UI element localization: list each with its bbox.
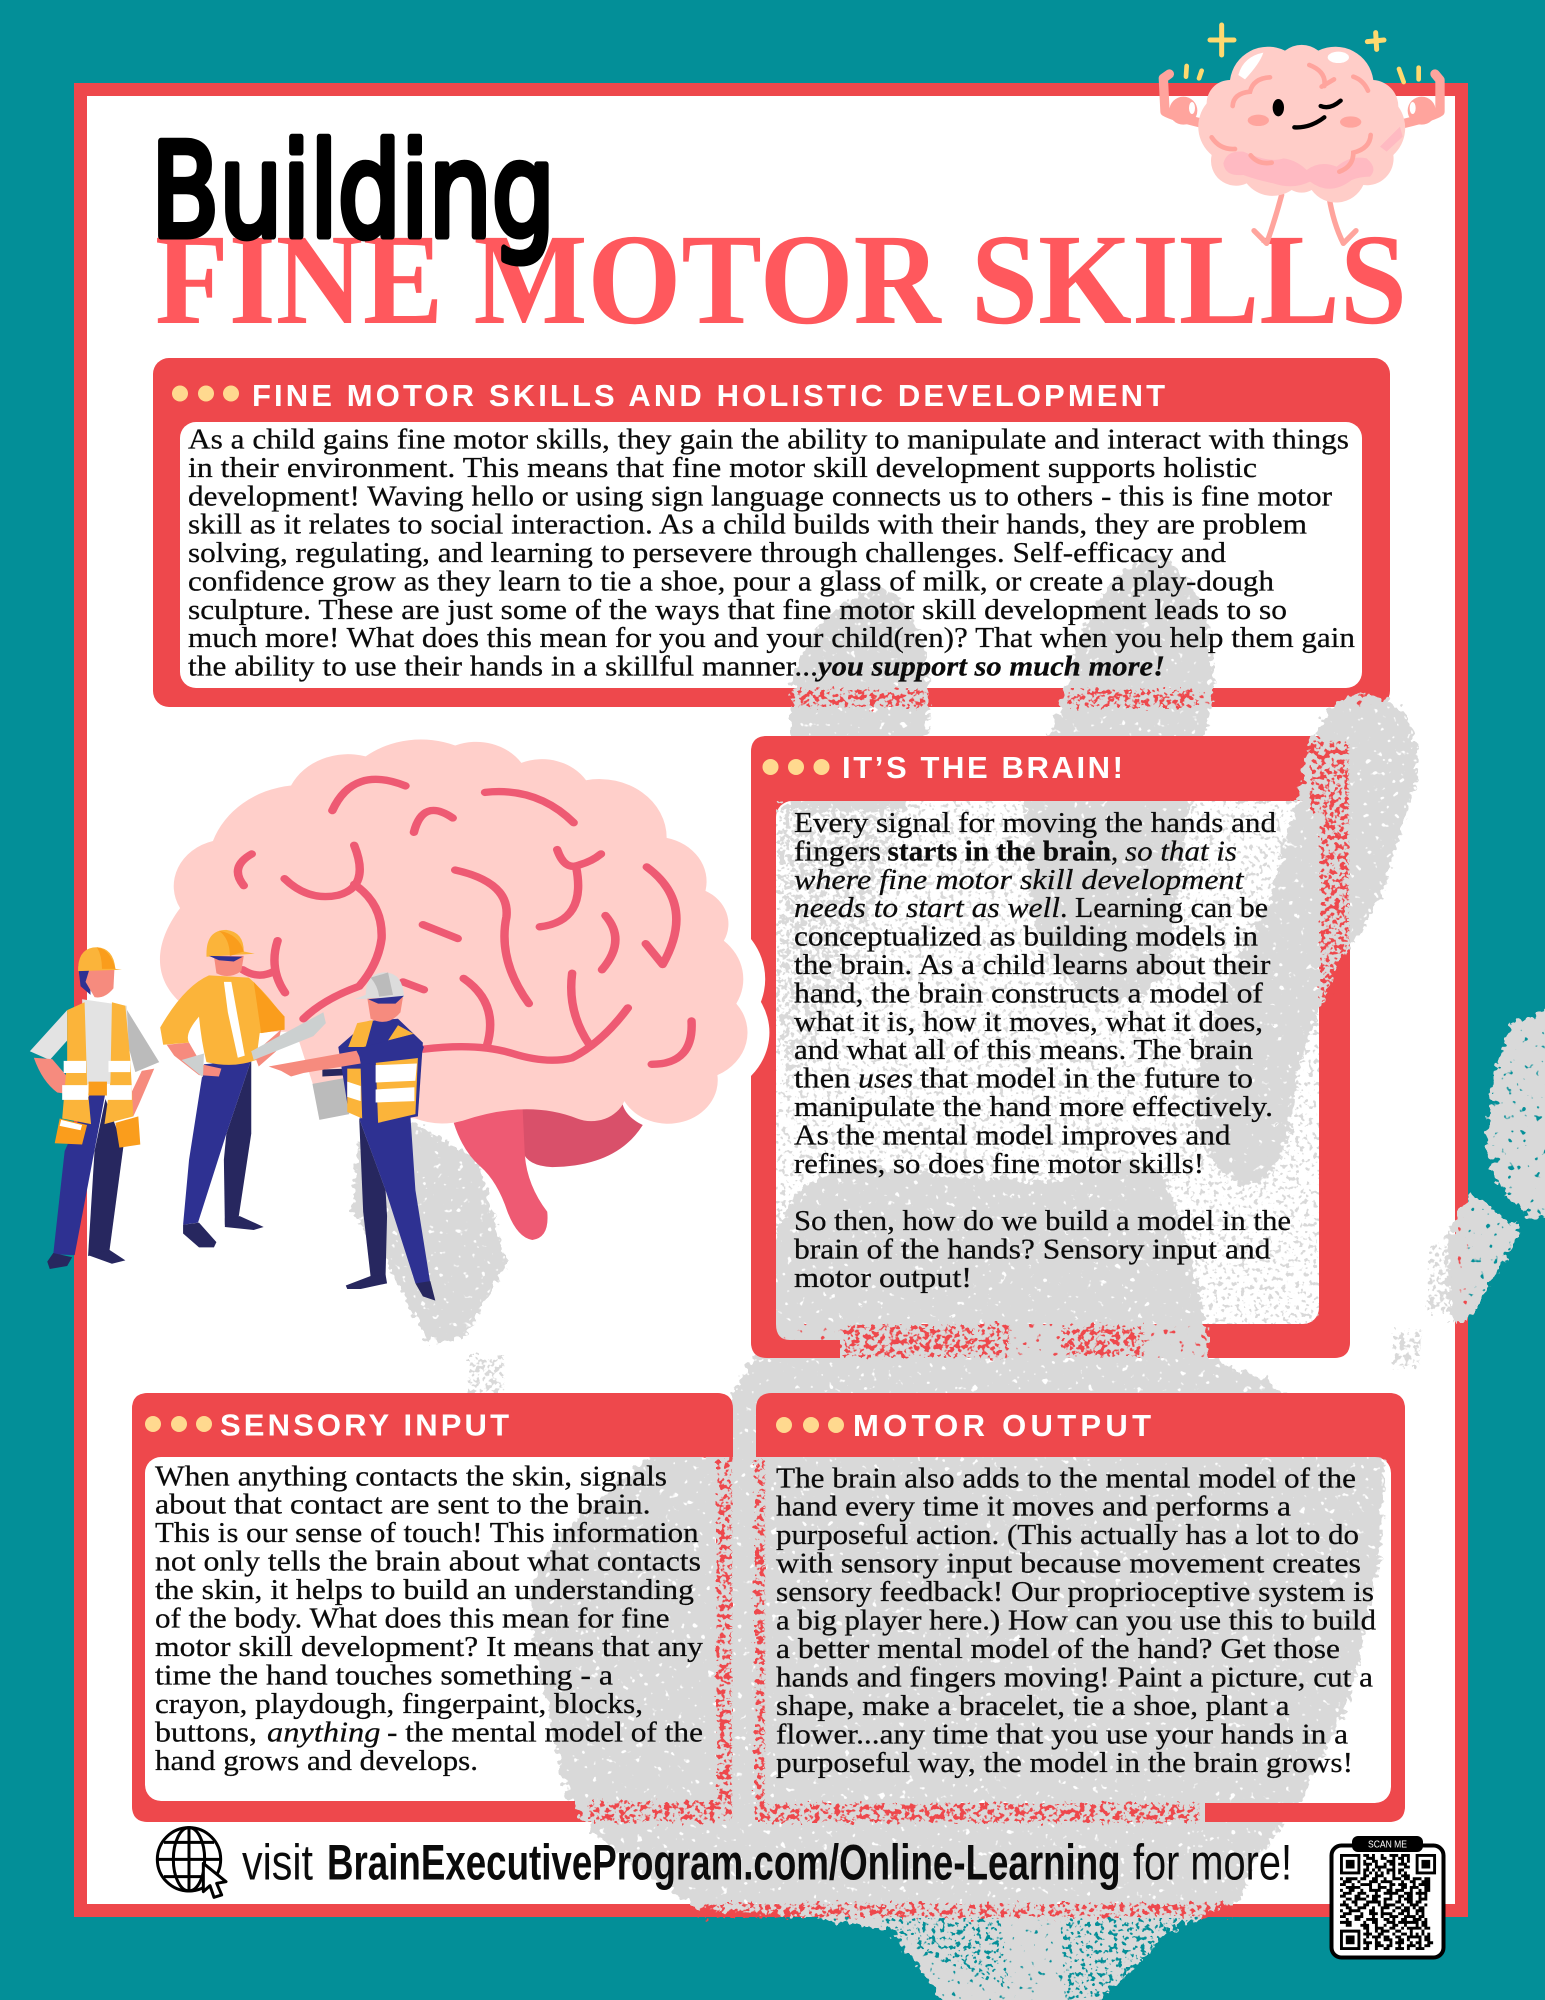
- footer: call to action: BrainExecutiveProgram.com/Online-Learning: [327, 1834, 1121, 1890]
- title: FINE MOTOR SKILLS: FINE MOTOR SKILLS: [155, 208, 1407, 352]
- text: motor output: purposeful action. (This actually has a lot to do: [776, 1519, 1359, 1551]
- text: it's the brain: what it is, how it moves, what it does,: [794, 1006, 1263, 1038]
- text: sensory input: buttons,: [155, 1716, 257, 1748]
- text: it's the brain: then: [794, 1063, 851, 1095]
- text: it's the brain: the brain. As a child learns about their: [794, 949, 1271, 981]
- cerebellum: [522, 1101, 643, 1167]
- text: sensory input: of the body. What does this mean for fine: [155, 1602, 670, 1634]
- text: sensory input: motor skill development? It means that any: [155, 1631, 704, 1663]
- text: motor output: hand every time it moves and performs a: [776, 1491, 1291, 1523]
- text: holistic development: solving, regulating, and learning to persevere through challenges. Self-efficacy and: [188, 537, 1227, 569]
- text: holistic development: As a child gains fine motor skills, they gain the ability to manipulate and interact with things: [188, 424, 1349, 456]
- text: motor output: The brain also adds to the mental model of the: [776, 1462, 1356, 1494]
- text: motor output: a big player here.) How can you use this to build: [776, 1604, 1377, 1636]
- text: sensory input: [155, 1460, 704, 1777]
- text: it's the brain: So then, how do we build a model in the: [794, 1205, 1291, 1237]
- text: motor output: hands and fingers moving! Paint a picture, cut a: [776, 1661, 1373, 1693]
- red header and side strips sitting above the handprint: [132, 736, 1405, 1822]
- text: it's the brain: fingers: [794, 835, 881, 867]
- text: holistic development: the ability to use their hands in a skillful manner...: [188, 651, 818, 683]
- text: sensory input: the skin, it helps to build an understanding: [155, 1574, 694, 1606]
- text: it's the brain: Every signal for moving the hands and: [794, 807, 1277, 839]
- text: sensory input: This is our sense of touch! This information: [155, 1517, 699, 1549]
- text: holistic development: [188, 424, 1356, 683]
- QR code with scan me tab: SCAN ME: [1368, 1840, 1407, 1850]
- text: sensory input: When anything contacts the skin, signals: [155, 1460, 667, 1492]
- text: sensory input: not only tells the brain about what contacts: [155, 1546, 701, 1578]
- brain halo cutting into panel: [751, 939, 770, 1076]
- text: it's the brain: where fine motor skill development: [794, 864, 1245, 896]
- mascot: flexing brain character: [1163, 25, 1440, 243]
- text: holistic development: confidence grow as they learn to tie a shoe, pour a glass of milk, or create a play-dough: [188, 565, 1275, 597]
- title: Building: Building: [151, 115, 555, 267]
- worker 2: [160, 930, 326, 1247]
- text: it's the brain: conceptualized as building models in: [794, 921, 1259, 953]
- worker 1: [30, 947, 159, 1269]
- cerebrum: [160, 740, 748, 1124]
- text: it's the brain: ,: [1111, 835, 1118, 867]
- text: holistic development: sculpture. These are just some of the ways that fine motor skill development leads to so: [188, 594, 1287, 626]
- text: holistic development: in their environment. This means that fine motor skill development supports holistic: [188, 452, 1257, 484]
- red speckle showing through the handprint: [590, 690, 1350, 1917]
- text: sensory input: time the hand touches something - a: [155, 1659, 613, 1691]
- footer: call to action: for more!: [1133, 1834, 1292, 1890]
- text: it's the brain: that model in the future to: [920, 1063, 1253, 1095]
- text: it's the brain: motor output!: [794, 1262, 972, 1294]
- text: it's the brain: uses: [858, 1063, 913, 1095]
- text: holistic development: you support so much more!: [815, 651, 1165, 683]
- brain stem: [454, 1103, 548, 1240]
- footer: call to action: visit: [242, 1834, 313, 1890]
- text: motor output: a better mental model of the hand? Get those: [776, 1633, 1340, 1665]
- worker 3: [269, 972, 435, 1301]
- text: it's the brain: . Learning can be: [1060, 892, 1268, 924]
- text: sensory input: crayon, playdough, fingerpaint, blocks,: [155, 1688, 643, 1720]
- panel background: motor output: [756, 1393, 1405, 1822]
- text: it's the brain: hand, the brain constructs a model of: [794, 977, 1263, 1009]
- text: it's the brain: As the mental model improves and: [794, 1119, 1231, 1151]
- text: holistic development: much more! What does this mean for you and your child(ren)? That when you help them gain: [188, 622, 1356, 654]
- text: holistic development: skill as it relates to social interaction. As a child builds with their hands, they are problem: [188, 509, 1307, 541]
- panel heading: motor output: MOTOR OUTPUT: [853, 1408, 1151, 1443]
- text: motor output: with sensory input because movement creates: [776, 1548, 1361, 1580]
- text: it's the brain: so that is: [1125, 835, 1237, 867]
- text: motor output: [776, 1462, 1377, 1779]
- panel background: sensory input: [132, 1393, 733, 1822]
- text: it's the brain: [794, 807, 1291, 1294]
- footer: globe cursor icon: [157, 1828, 226, 1897]
- teal speckle showing through the handprint: [870, 1918, 1190, 2000]
- text: it's the brain: manipulate the hand more effectively.: [794, 1091, 1273, 1123]
- brain folds: [238, 779, 692, 1064]
- text: it's the brain: brain of the hands? Sensory input and: [794, 1233, 1271, 1265]
- text: motor output: flower...any time that you use your hands in a: [776, 1718, 1348, 1750]
- text: sensory input: anything: [267, 1716, 380, 1748]
- text: it's the brain: starts in the brain: [888, 835, 1111, 867]
- text: motor output: purposeful way, the model in the brain grows!: [776, 1747, 1353, 1779]
- panel background: holistic development: [153, 358, 1390, 707]
- illustration: large brain with workers: [30, 740, 748, 1301]
- panel heading: it's the brain: IT’S THE BRAIN!: [842, 750, 1123, 785]
- text: sensory input: about that contact are sent to the brain.: [155, 1489, 651, 1521]
- text: sensory input: hand grows and develops.: [155, 1745, 478, 1777]
- text: motor output: sensory feedback! Our proprioceptive system is: [776, 1576, 1374, 1608]
- text: it's the brain: and what all of this means. The brain: [794, 1034, 1254, 1066]
- text: it's the brain: needs to start as well: [794, 892, 1060, 924]
- panel heading: holistic development: FINE MOTOR SKILLS AND HOLISTIC DEVELOPMENT: [252, 378, 1165, 413]
- panel background: it's the brain: [751, 736, 1350, 1358]
- text: motor output: shape, make a bracelet, tie a shoe, plant a: [776, 1690, 1290, 1722]
- QR code with scan me tab: [1332, 1836, 1444, 1958]
- panel heading: sensory input: SENSORY INPUT: [220, 1408, 509, 1442]
- grey handprint texture: [352, 555, 1545, 2000]
- text: it's the brain: refines, so does fine motor skills!: [794, 1148, 1204, 1180]
- text: sensory input: - the mental model of the: [387, 1716, 703, 1748]
- text: holistic development: development! Waving hello or using sign language connects us to others - this is fine motor: [188, 480, 1332, 512]
